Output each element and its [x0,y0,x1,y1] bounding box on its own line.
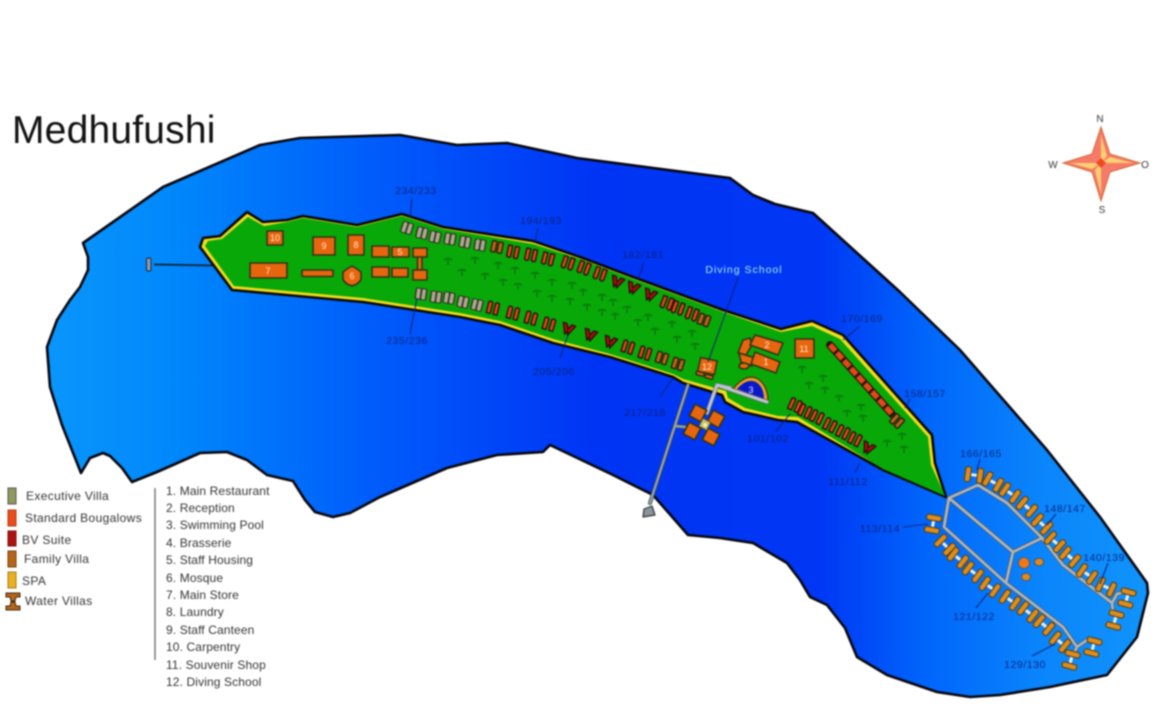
villa number labels: 121/122 [953,611,995,623]
legend: numbered facilities: 12. Diving School [166,675,261,689]
water villa walkways [944,485,1125,657]
legend: numbered facilities [166,484,270,689]
jetty walkways [643,385,767,517]
villa number labels: 158/157 [904,388,946,400]
label: diving school: Diving School [705,264,783,276]
legend: numbered facilities: 8. Laundry [166,605,224,619]
legend: numbered facilities: 7. Main Store [166,588,239,602]
spa cluster [1018,558,1044,581]
legend: villa types: SPA [22,574,46,588]
buildings: west service area: 8 [353,240,359,250]
building: diving school 12: 12 [702,362,712,372]
villa number labels: 182/181 [622,249,664,261]
buildings: west service area [250,231,427,286]
building: brasserie 4 [683,404,725,446]
buildings: west service area: 5 [397,247,403,257]
title: Medhufushi [12,109,216,152]
legend: villa types: Executive Villa [26,489,109,503]
buildings: west service area: 7 [265,266,271,276]
villa number labels: 113/114 [860,523,900,535]
buildings: restaurant, reception, shop: 11 [799,344,809,354]
villa number labels: 101/102 [747,433,789,445]
swimming pool: 3 [748,385,754,395]
villa number labels: 148/147 [1044,503,1086,515]
villas: north row [399,220,711,327]
buildings: restaurant, reception, shop: 2 [764,340,770,350]
villa number labels: 170/169 [841,313,883,325]
villa number labels: 235/236 [386,335,428,347]
buildings: west service area: 6 [349,271,355,281]
villa number labels: 140/139 [1083,552,1125,564]
compass rose [1048,114,1149,216]
villa number labels: 129/130 [1004,659,1046,671]
legend: villa types [6,488,142,610]
legend: numbered facilities: 10. Carpentry [166,640,240,654]
swimming pool [733,377,768,402]
legend: villa types: Water Villas [25,594,93,608]
legend: numbered facilities: 9. Staff Canteen [166,623,254,637]
villas: east north row [830,345,905,429]
sea: lagoon outline [47,135,1148,697]
legend: villa types: BV Suite [22,533,72,547]
buildings: restaurant, reception, shop: 1 [763,357,769,367]
buildings: restaurant, reception, shop [738,335,814,373]
legend: villa types: Standard Bougalows [25,511,142,525]
island: grass [205,216,945,496]
legend: numbered facilities: 11. Souvenir Shop [166,658,266,672]
island: beach and outline [200,212,946,497]
legend: numbered facilities: 4. Brasserie [166,536,232,550]
label: diving school [705,264,783,362]
legend: numbered facilities: 3. Swimming Pool [166,518,264,532]
building: diving school 12 [696,357,717,379]
villas: south row [414,287,685,371]
pier: west jetty [146,258,213,271]
villa number labels: 234/233 [395,185,437,197]
villas: east south row [788,397,876,456]
villa number labels: 205/206 [533,366,575,378]
legend: numbered facilities: 6. Mosque [166,571,223,585]
villa number labels: 166/165 [960,448,1002,460]
buildings: west service area: 10 [270,233,280,243]
water villas: north arm [964,466,1137,631]
palm trees [444,258,908,453]
villa number labels [386,185,1125,671]
buildings: west service area: 9 [321,241,327,251]
compass rose: N [1096,114,1104,125]
legend: villa types: Family Villa [24,552,89,566]
villa number labels: 111/112 [828,476,868,488]
legend: numbered facilities: 1. Main Restaurant [166,484,270,498]
compass rose: W [1048,160,1058,171]
water villas: south arm [924,514,1103,671]
compass rose: S [1099,205,1106,216]
villa number labels: 194/193 [520,215,562,227]
legend: numbered facilities: 2. Reception [166,501,235,515]
legend divider [154,488,156,660]
villa number labels: 217/218 [624,407,666,419]
legend: numbered facilities: 5. Staff Housing [166,553,253,567]
compass rose: O [1141,160,1149,171]
